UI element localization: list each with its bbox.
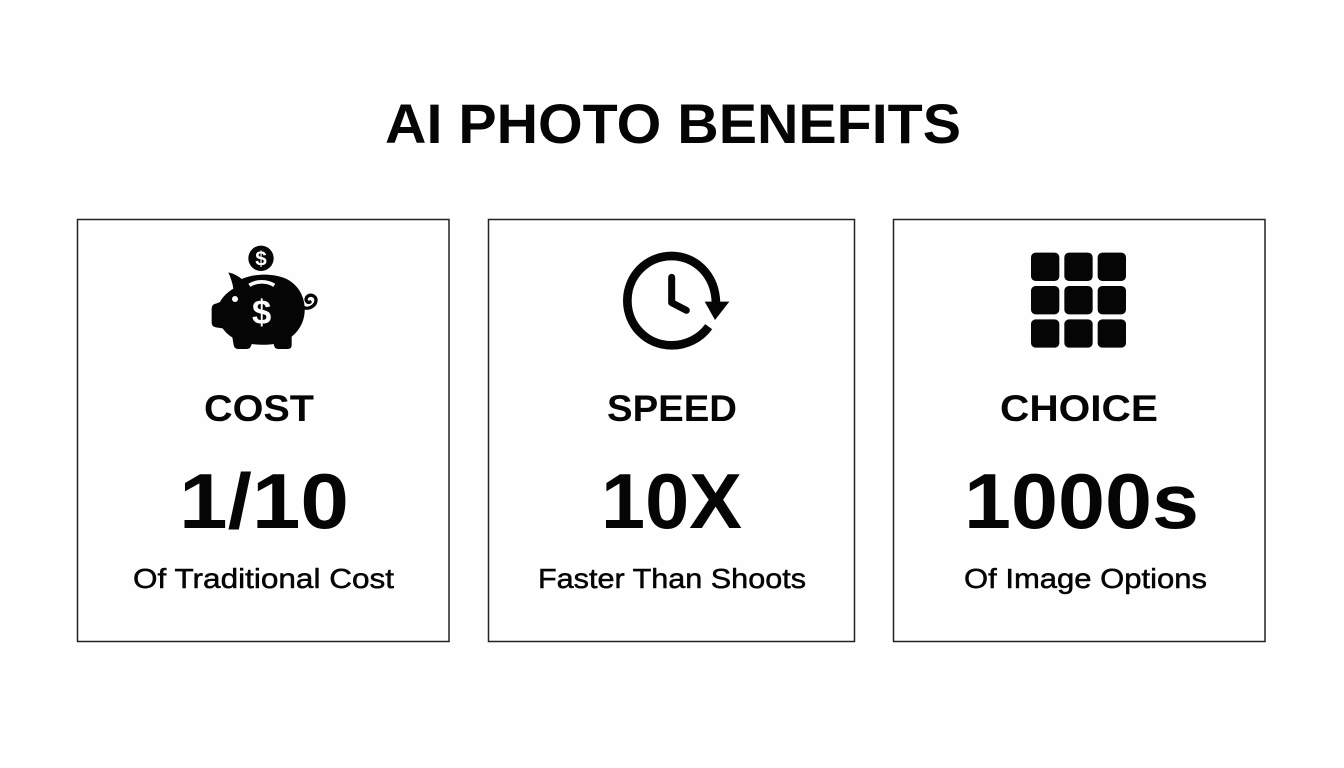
value: 1/10: 1/10 (179, 457, 349, 545)
panel border: speed (488, 220, 854, 642)
icon: clock with arrow (627, 256, 729, 345)
heading: cost: COST (204, 388, 314, 429)
panel: choice (894, 220, 1265, 642)
value: 10X: 10X (601, 457, 742, 545)
panel: cost (78, 220, 449, 642)
heading: speed: SPEED (607, 388, 737, 429)
value: 1000s: 1000s (964, 457, 1199, 545)
caption: choice: Of Image Options (964, 563, 1207, 594)
caption: speed: Faster Than Shoots (538, 563, 806, 594)
caption: cost: Of Traditional Cost (133, 563, 394, 594)
icon: piggy bank: $ (255, 248, 267, 271)
heading: choice: CHOICE (1000, 388, 1158, 429)
panel border: choice (894, 220, 1265, 642)
icon: piggy bank (212, 246, 316, 349)
title: AI PHOTO BENEFITS (385, 92, 961, 155)
icon: piggy bank: $ (252, 294, 271, 332)
icon: image grid (1031, 253, 1126, 348)
panel: speed (488, 220, 854, 642)
panel border: cost (78, 220, 449, 642)
